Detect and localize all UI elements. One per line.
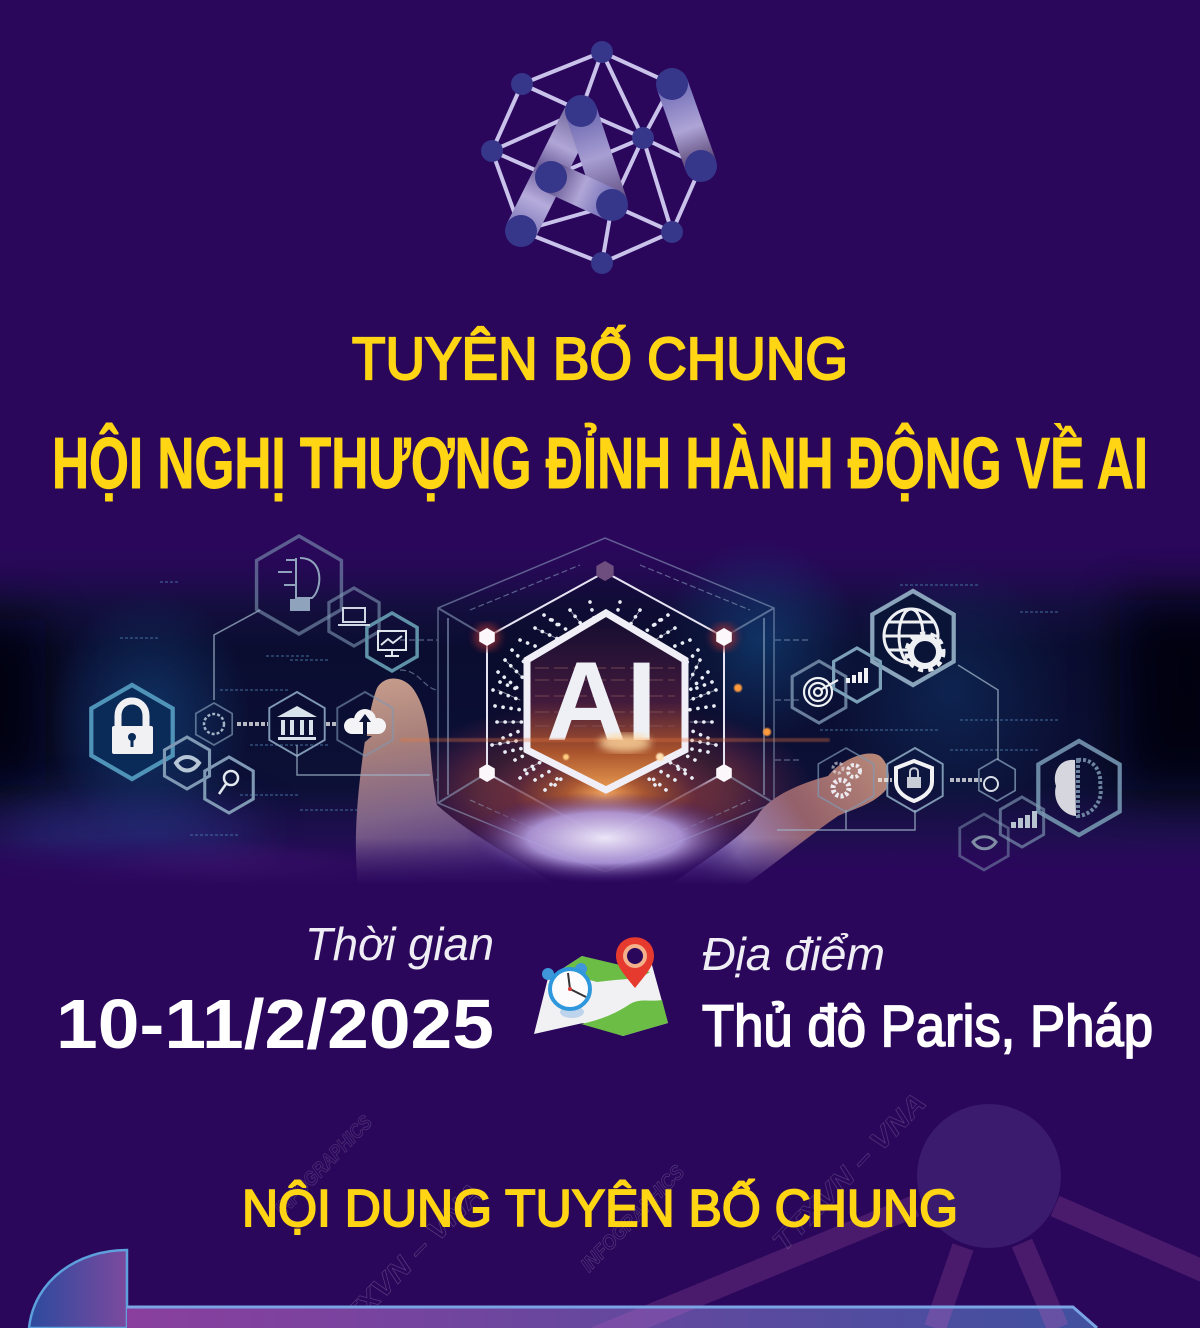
icon: monitor <box>378 631 406 656</box>
icon: padlock <box>112 701 153 754</box>
AI hexagon badge <box>527 613 685 790</box>
icon: map with clock and pin <box>534 937 668 1036</box>
decorative network node <box>917 1104 1061 1248</box>
bottom fade <box>83 841 802 885</box>
hexagon frames <box>91 536 1120 870</box>
content header tab <box>28 1248 1098 1328</box>
icon: small handshake <box>973 837 996 849</box>
date label: Thời gian <box>305 918 494 970</box>
icon: bank <box>277 706 317 740</box>
icon: brain <box>1055 760 1101 816</box>
decorative network lines <box>590 1206 1200 1328</box>
watermarks: TTXVN – VNA <box>766 1087 932 1257</box>
location label: Địa điểm <box>702 928 885 980</box>
connectors <box>214 610 998 830</box>
icon: coin <box>984 777 998 791</box>
icon: light bulb <box>278 558 319 610</box>
AI hexagon badge: AI <box>546 639 657 764</box>
hand: pointing finger <box>356 678 538 876</box>
hand: open palm <box>670 753 889 885</box>
inner hexagon frame with nodes <box>474 561 737 850</box>
light flare <box>400 684 830 761</box>
icon: target <box>804 678 838 706</box>
outer circuit hexagon <box>400 538 810 872</box>
location value: Thủ đô Paris, Pháp <box>702 994 1153 1059</box>
circuit dots around AI hexagon <box>492 602 716 790</box>
icon: magnifier <box>219 771 238 794</box>
watermarks: INFOGRAPHICS <box>577 1161 690 1276</box>
icon: laptop <box>338 608 370 625</box>
icon: gear head <box>204 714 224 734</box>
icon: growth chart <box>846 668 868 683</box>
icon: gears <box>833 763 860 796</box>
icon: small chart <box>1011 811 1037 828</box>
watermarks: INFOGRAPHICS <box>271 1111 377 1220</box>
icon: shield lock <box>896 761 932 801</box>
watermarks <box>271 1087 932 1328</box>
title line 1: TUYÊN BỐ CHUNG <box>352 326 848 392</box>
icon: globe with gear <box>884 609 943 670</box>
lower lavender glow <box>476 793 739 880</box>
faint data lines <box>120 582 1060 835</box>
section heading: NỘI DUNG TUYÊN BỐ CHUNG <box>242 1179 958 1238</box>
banner image: AI technology <box>0 534 1200 882</box>
date value: 10-11/2/2025 <box>56 985 494 1063</box>
icon: handshake <box>176 757 199 770</box>
logo: AI network <box>481 41 717 274</box>
icon: cloud <box>344 709 386 742</box>
